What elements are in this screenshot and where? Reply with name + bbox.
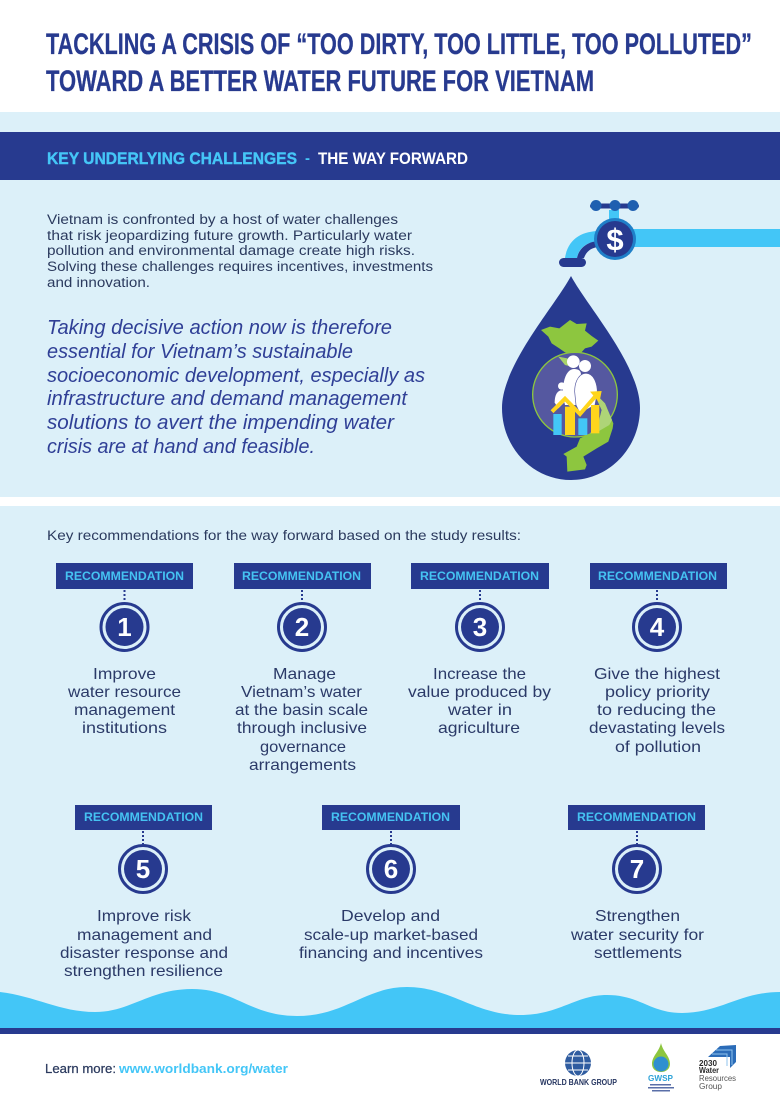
recommendation 6: Develop and: [341, 908, 440, 925]
header band: KEY UNDERLYING CHALLENGES: [47, 150, 297, 168]
header band: [0, 132, 780, 180]
recommendation 4: [589, 563, 727, 756]
recommendation 3: [408, 563, 551, 737]
footer link: www.worldbank.org/water: [118, 1061, 288, 1076]
family silhouette: [555, 355, 597, 413]
recommendation 3: 3: [473, 612, 487, 642]
recommendation 6: RECOMMENDATION: [331, 812, 450, 824]
recommendation 7: [568, 805, 705, 962]
footer link: [45, 1061, 288, 1076]
recommendation 5: Improve risk: [97, 908, 192, 925]
logo: World Bank Group: WORLD BANK GROUP: [540, 1078, 618, 1087]
title: [46, 28, 752, 98]
recommendations intro line: Key recommendations for the way forward based on the study results:: [47, 527, 521, 543]
intro text block: Solving these challenges requires incentives, investments: [47, 259, 433, 274]
recommendation 2: governance: [260, 739, 346, 756]
intro text block: Vietnam is confronted by a host of water challenges: [47, 212, 398, 227]
recommendation 2: RECOMMENDATION: [242, 571, 361, 583]
recommendation 4: policy priority: [605, 684, 710, 701]
recommendation 3: RECOMMENDATION: [420, 571, 539, 583]
recommendation 4: RECOMMENDATION: [598, 571, 717, 583]
logo: 2030 Water Resources Group: [699, 1045, 736, 1091]
intro text block: and innovation.: [47, 275, 150, 290]
recommendation 6: 6: [384, 854, 398, 884]
recommendation 3: value produced by: [408, 684, 551, 701]
recommendation 1: Improve: [93, 666, 156, 683]
recommendation 2: Manage: [273, 666, 336, 683]
recommendation 4: 4: [650, 612, 665, 642]
recommendation 3: Increase the: [433, 666, 526, 683]
italic call to action: socioeconomic development, especially as: [47, 365, 425, 387]
italic call to action: essential for Vietnam’s sustainable: [47, 341, 353, 363]
icon: water drop with map, family and chart: [502, 276, 640, 480]
wave band: [0, 987, 780, 1034]
footer link: Learn more:: [45, 1061, 116, 1076]
title: TOWARD A BETTER WATER FUTURE FOR VIETNAM: [46, 65, 594, 98]
recommendation 1: water resource: [67, 684, 181, 701]
recommendation 6: scale-up market-based: [304, 927, 478, 944]
logo: 2030 Water Resources Group: Group: [699, 1082, 723, 1091]
recommendation 3: water in: [447, 702, 512, 719]
recommendation 5: [60, 805, 228, 980]
recommendation 2: Vietnam’s water: [241, 684, 363, 701]
italic call to action: infrastructure and demand management: [47, 388, 408, 410]
logo: 2030 Water Resources Group: Water: [699, 1066, 719, 1075]
italic call to action: Taking decisive action now is therefore: [47, 317, 392, 339]
recommendation 7: water security for: [570, 927, 705, 944]
recommendation 7: Strengthen: [595, 908, 680, 925]
recommendation 1: [56, 563, 193, 737]
recommendation 7: settlements: [594, 945, 682, 962]
logo: 2030 Water Resources Group: 2030: [699, 1059, 718, 1068]
recommendation 2: arrangements: [249, 757, 356, 774]
map of Vietnam: [533, 320, 617, 472]
panel: recommendations: [0, 506, 780, 1028]
header band: -: [305, 150, 310, 167]
intro text block: pollution and environmental damage create high risks.: [47, 243, 415, 258]
icon: water faucet with dollar sign: [559, 200, 780, 267]
recommendation 1: institutions: [82, 720, 167, 737]
recommendation 5: RECOMMENDATION: [84, 812, 203, 824]
recommendation 6: financing and incentives: [299, 945, 483, 962]
icon: water faucet with dollar sign: $: [606, 222, 624, 257]
panel: introduction: [0, 112, 780, 497]
italic call to action: crisis are at hand and feasible.: [47, 436, 315, 458]
recommendation 5: strengthen resilience: [64, 963, 223, 980]
header band: THE WAY FORWARD: [318, 150, 468, 168]
recommendation 5: management and: [77, 927, 212, 944]
recommendation 7: 7: [630, 854, 644, 884]
recommendation 2: [234, 563, 371, 774]
recommendation 2: 2: [295, 612, 309, 642]
bar chart with rising arrow: [552, 391, 602, 435]
recommendation 4: Give the highest: [594, 666, 721, 683]
logo: GWSP: GWSP: [648, 1073, 673, 1083]
logo: World Bank Group: [540, 1050, 618, 1087]
intro text block: [47, 212, 433, 290]
recommendation 2: at the basin scale: [235, 702, 368, 719]
recommendation 4: of pollution: [615, 739, 701, 756]
italic call to action: solutions to avert the impending water: [47, 412, 395, 434]
italic call to action: [47, 317, 425, 458]
recommendation 3: agriculture: [438, 720, 520, 737]
recommendation 4: devastating levels: [589, 720, 725, 737]
recommendation 1: 1: [117, 612, 132, 642]
recommendation 6: [299, 805, 483, 962]
recommendation 7: RECOMMENDATION: [577, 812, 696, 824]
recommendation 1: RECOMMENDATION: [65, 571, 184, 583]
logo: GWSP: [648, 1043, 674, 1092]
recommendation 2: through inclusive: [237, 720, 367, 737]
recommendation 4: to reducing the: [597, 702, 716, 719]
logo: 2030 Water Resources Group: Resources: [699, 1074, 736, 1083]
recommendation 1: management: [74, 702, 176, 719]
recommendation 5: 5: [136, 854, 150, 884]
intro text block: that risk jeopardizing future growth. Particularly water: [47, 228, 413, 243]
recommendation 5: disaster response and: [60, 945, 228, 962]
